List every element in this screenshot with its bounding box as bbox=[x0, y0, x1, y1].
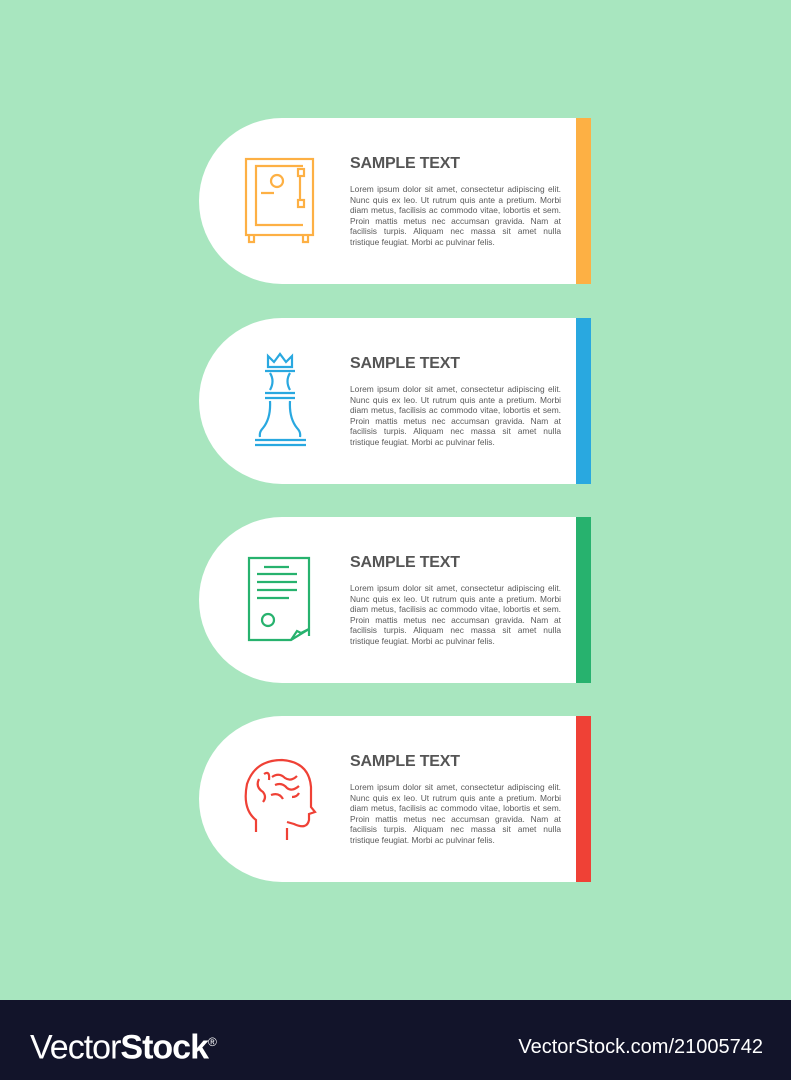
icon: safe bbox=[244, 158, 314, 244]
text block bbox=[350, 753, 561, 844]
text block: SAMPLE TEXT bbox=[350, 355, 460, 372]
text block: tristique feugiat. Morbi ac pulvinar felis. bbox=[350, 636, 495, 646]
text block: diam metus, facilisis ac commodo vitae, lobortis et sem. bbox=[350, 803, 561, 813]
card 1: safe bbox=[199, 118, 576, 284]
footer watermark bar bbox=[0, 1000, 791, 1080]
logo: VectorStock® bbox=[30, 1028, 216, 1066]
text block: facilisis turpis. Aliquam nec massa sit amet nulla bbox=[350, 226, 561, 236]
icon: head with brain bbox=[244, 758, 317, 840]
text block: SAMPLE TEXT bbox=[350, 155, 460, 172]
text block: Lorem ipsum dolor sit amet, consectetur adipiscing elit. bbox=[350, 184, 561, 194]
card 4: brain bbox=[199, 716, 576, 882]
text block: Proin mattis metus nec accumsan gravida. Nam at bbox=[350, 216, 561, 226]
text block: SAMPLE TEXT bbox=[350, 554, 460, 571]
card 2: chess bbox=[199, 318, 576, 484]
text block bbox=[350, 355, 561, 446]
text block: facilisis turpis. Aliquam nec massa sit amet nulla bbox=[350, 625, 561, 635]
text block: diam metus, facilisis ac commodo vitae, lobortis et sem. bbox=[350, 604, 561, 614]
text block: Nunc quis ex leo. Ut rutrum quis ante a pretium. Morbi bbox=[350, 394, 561, 404]
accent bar green bbox=[576, 517, 591, 683]
text block: Proin mattis metus nec accumsan gravida. Nam at bbox=[350, 614, 561, 624]
text block: tristique feugiat. Morbi ac pulvinar felis. bbox=[350, 236, 495, 246]
text block: facilisis turpis. Aliquam nec massa sit amet nulla bbox=[350, 824, 561, 834]
text block: diam metus, facilisis ac commodo vitae, lobortis et sem. bbox=[350, 205, 561, 215]
text block: tristique feugiat. Morbi ac pulvinar felis. bbox=[350, 436, 495, 446]
text block: Lorem ipsum dolor sit amet, consectetur adipiscing elit. bbox=[350, 583, 561, 593]
icon: chess queen bbox=[255, 352, 306, 446]
url: VectorStock.com/21005742 bbox=[518, 1036, 763, 1058]
text block: Nunc quis ex leo. Ut rutrum quis ante a pretium. Morbi bbox=[350, 194, 561, 204]
card 3: document bbox=[199, 517, 576, 683]
text block: Lorem ipsum dolor sit amet, consectetur adipiscing elit. bbox=[350, 782, 561, 792]
text block: tristique feugiat. Morbi ac pulvinar felis. bbox=[350, 834, 495, 844]
text block: diam metus, facilisis ac commodo vitae, lobortis et sem. bbox=[350, 405, 561, 415]
text block bbox=[350, 155, 561, 246]
accent bar blue bbox=[576, 318, 591, 484]
text block bbox=[350, 554, 561, 646]
text block: Nunc quis ex leo. Ut rutrum quis ante a pretium. Morbi bbox=[350, 792, 561, 802]
text block: facilisis turpis. Aliquam nec massa sit amet nulla bbox=[350, 426, 561, 436]
text block: SAMPLE TEXT bbox=[350, 753, 460, 770]
text block: Proin mattis metus nec accumsan gravida. Nam at bbox=[350, 814, 561, 824]
accent bar red bbox=[576, 716, 591, 882]
text block: Lorem ipsum dolor sit amet, consectetur adipiscing elit. bbox=[350, 384, 561, 394]
icon: document bbox=[248, 556, 310, 642]
text block: Proin mattis metus nec accumsan gravida. Nam at bbox=[350, 416, 561, 426]
accent bar orange bbox=[576, 118, 591, 284]
text block: Nunc quis ex leo. Ut rutrum quis ante a pretium. Morbi bbox=[350, 594, 561, 604]
